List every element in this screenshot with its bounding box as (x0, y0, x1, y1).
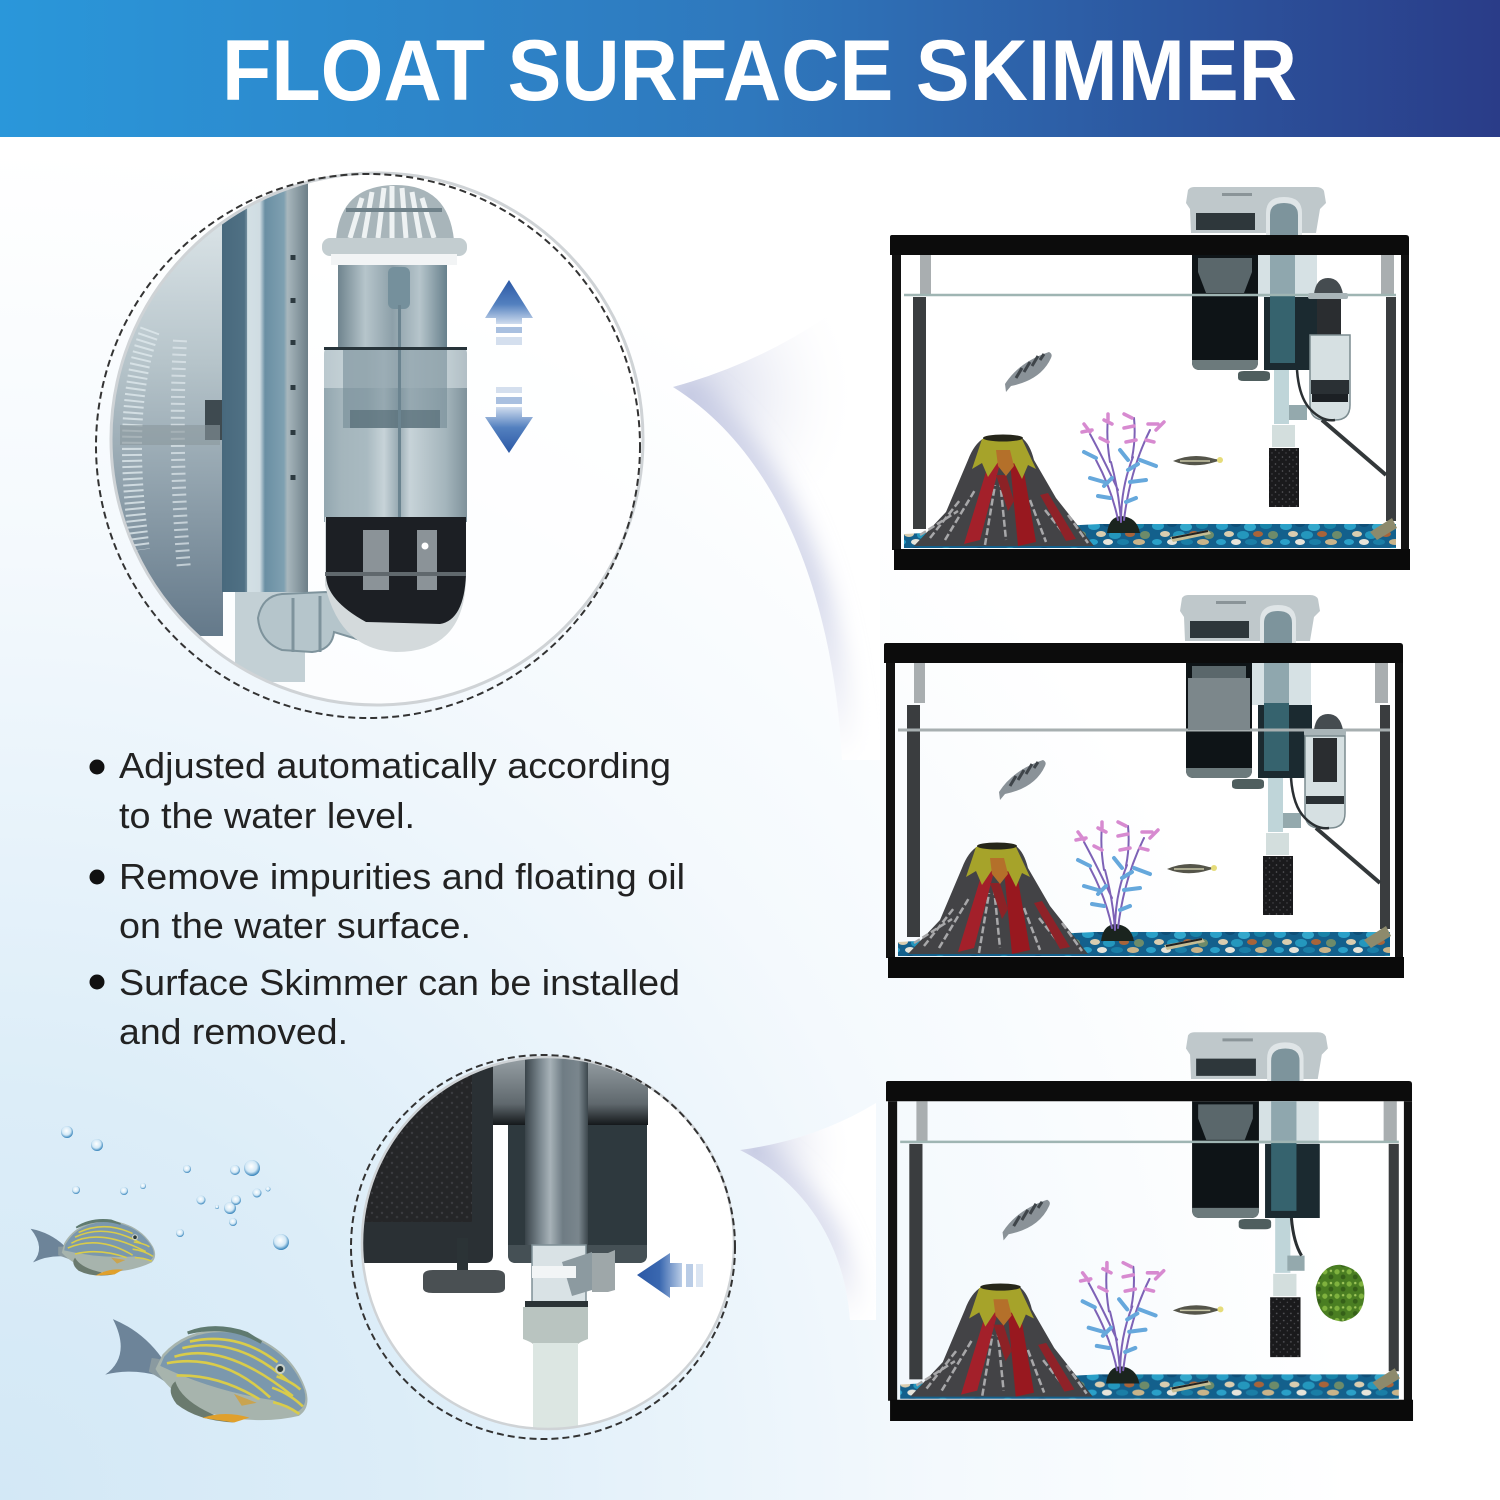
title: FLOAT SURFACE SKIMMER (222, 23, 1297, 119)
thumb screw (423, 1263, 505, 1293)
upper filter body (493, 1055, 648, 1125)
mini skimmer (1308, 278, 1350, 420)
floating cup upper (338, 265, 447, 350)
side connector (258, 592, 368, 652)
filter waterfall (1188, 678, 1250, 730)
bullet 3: Surface Skimmer can be installed (119, 962, 680, 1003)
skimmer dome (322, 185, 467, 265)
feature list (90, 745, 685, 1052)
bullet 1: to the water level. (119, 795, 415, 836)
air line and connector (1289, 370, 1386, 475)
pipe base (235, 592, 305, 682)
icon: up arrow (485, 280, 533, 345)
aquarium 3 (886, 1032, 1413, 1421)
panel: float skimmer close-up (96, 173, 643, 718)
cylinder body (324, 347, 467, 522)
aquarium 2 (884, 595, 1404, 978)
sponge filter (364, 1074, 472, 1222)
bullet 3: and removed. (119, 1011, 348, 1052)
bullet 1 (90, 745, 671, 836)
vertical intake pipe (222, 180, 308, 592)
bullet 3 (90, 962, 680, 1052)
icon: left arrow (637, 1253, 703, 1298)
icon: large fish (97, 1305, 319, 1439)
moss ball (1316, 1265, 1364, 1322)
title banner (0, 0, 1500, 137)
carbon media (325, 517, 466, 652)
pump (508, 1125, 647, 1263)
callout wedge: tank 3 (740, 1104, 876, 1320)
icon: bubbles (61, 1126, 289, 1250)
filter frame (363, 1066, 493, 1263)
aquarium 1 (890, 187, 1410, 570)
panel: connector close-up (351, 1050, 735, 1439)
icon: small fish (31, 1220, 155, 1276)
air line and connector (1283, 778, 1380, 883)
lower tube (523, 1301, 588, 1438)
connector (1287, 1218, 1305, 1271)
bullet 1: Adjusted automatically according (119, 745, 671, 786)
bullet 2: Remove impurities and floating oil (119, 856, 685, 897)
bullet 2 (90, 856, 685, 946)
water line (900, 1141, 1399, 1143)
icon: down arrow (485, 387, 533, 453)
intake tube (525, 1050, 588, 1245)
clear connector (532, 1245, 615, 1302)
mini skimmer raised (1304, 714, 1346, 828)
close-up background equipment (112, 224, 223, 636)
callout wedge: tanks 1 and 2 (673, 346, 846, 706)
raised water line (898, 728, 1390, 732)
bullet 2: on the water surface. (119, 905, 471, 946)
water line (904, 294, 1396, 296)
